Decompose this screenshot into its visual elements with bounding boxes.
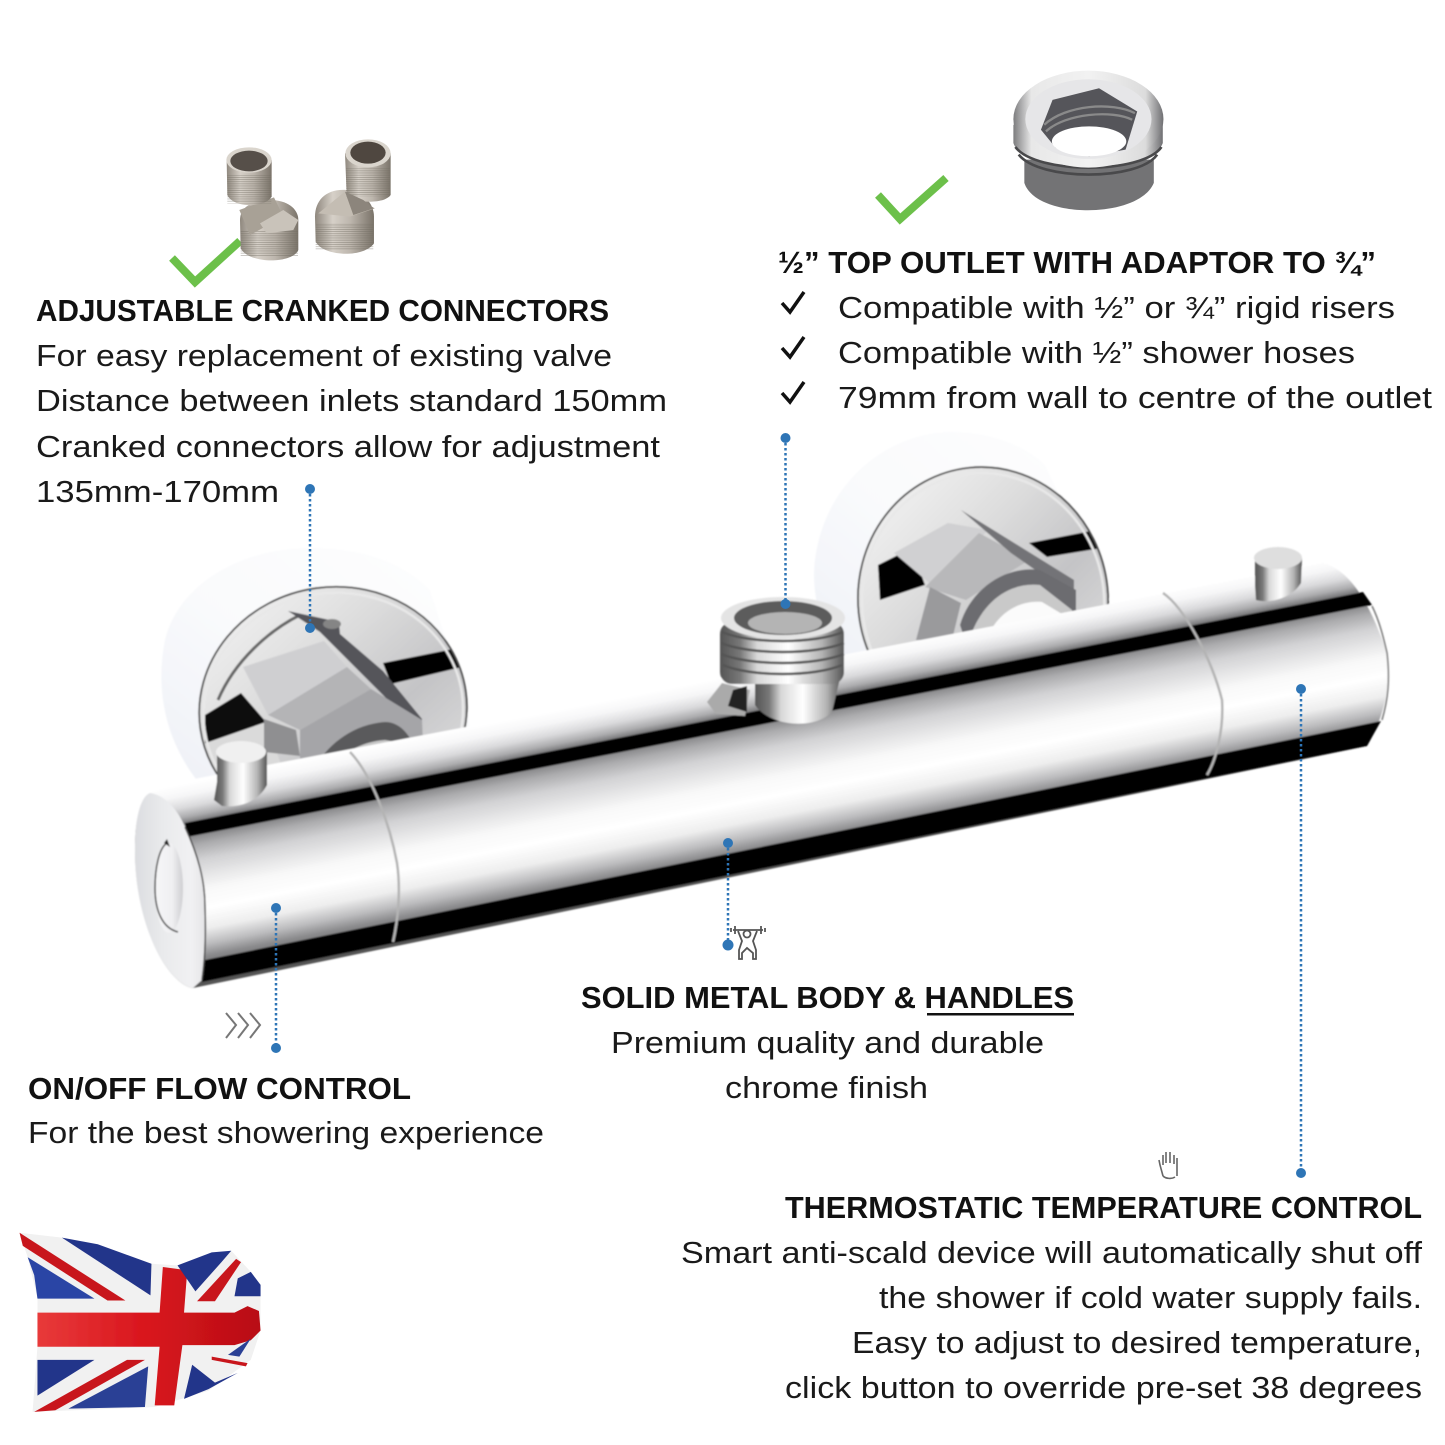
body text <box>36 338 667 509</box>
body text: Easy to adjust to desired temperature, <box>852 1325 1422 1360</box>
left collar seam <box>350 752 399 942</box>
heading: ADJUSTABLE CRANKED CONNECTORS <box>36 293 609 328</box>
checklist: 79mm from wall to centre of the outlet <box>838 380 1432 415</box>
right button <box>1254 547 1302 601</box>
callout: cranked connectors <box>36 293 667 509</box>
top outlet <box>707 597 845 724</box>
product image: shower valve <box>135 432 1388 988</box>
valve body <box>135 563 1388 988</box>
icon: check mark right <box>878 178 946 219</box>
right plate rim <box>845 455 1121 745</box>
heading: SOLID METAL BODY & HANDLES <box>581 980 1074 1015</box>
body text: For the best showering experience <box>28 1115 544 1150</box>
left chrome plate <box>200 587 467 772</box>
body text: Cranked connectors allow for adjustment <box>36 429 660 464</box>
left plate rim <box>183 570 483 850</box>
checklist: Compatible with ½” shower hoses <box>838 335 1355 370</box>
right collar seam <box>1163 593 1222 775</box>
icon: hand <box>1159 1152 1177 1178</box>
body text: chrome finish <box>725 1070 928 1105</box>
leader line: thermostat <box>1296 684 1306 1178</box>
body text: Premium quality and durable <box>611 1025 1044 1060</box>
heading: THERMOSTATIC TEMPERATURE CONTROL <box>785 1190 1422 1225</box>
heading: ON/OFF FLOW CONTROL <box>28 1071 411 1106</box>
right end edge <box>1372 606 1388 720</box>
body text: click button to override pre-set 38 degrees <box>785 1370 1422 1405</box>
leader line: connectors <box>305 484 315 633</box>
callout: on/off flow control <box>28 1071 544 1150</box>
leader line: body <box>722 838 734 950</box>
body text: For easy replacement of existing valve <box>36 338 612 373</box>
leader line: outlet <box>780 433 790 609</box>
right connector <box>315 139 391 254</box>
checklist <box>782 290 1432 415</box>
body text: the shower if cold water supply fails. <box>879 1280 1422 1315</box>
icon: weightlifter <box>731 926 765 959</box>
product image: cranked connectors <box>226 139 391 260</box>
right wall mount cylinder <box>814 432 1110 680</box>
left end cap <box>135 793 205 988</box>
left button <box>214 741 267 806</box>
handles underline <box>927 1013 1074 1016</box>
right chrome plate <box>858 468 1108 650</box>
body text: Distance between inlets standard 150mm <box>36 383 667 418</box>
leader line: flow control <box>271 903 281 1053</box>
icon: check mark left <box>172 241 240 282</box>
body text <box>681 1235 1422 1405</box>
left connector <box>226 147 298 260</box>
lower black reflection band <box>202 721 1381 982</box>
callout: top outlet <box>778 245 1432 415</box>
body text: 135mm-170mm <box>36 474 279 509</box>
callout: solid metal body <box>581 980 1074 1105</box>
body text: Smart anti-scald device will automatically shut off <box>681 1235 1422 1270</box>
product image: adaptor <box>1013 71 1163 210</box>
callout: thermostatic temperature control <box>681 1190 1422 1405</box>
heading: ½” TOP OUTLET WITH ADAPTOR TO ¾” <box>778 245 1376 280</box>
body text <box>611 1025 1044 1105</box>
left wall mount cylinder <box>161 548 470 790</box>
icon: union jack flag <box>20 1233 261 1412</box>
checklist: Compatible with ½” or ¾” rigid risers <box>838 290 1395 325</box>
icon: chevrons <box>226 1013 260 1038</box>
upper black reflection band <box>185 592 1372 837</box>
